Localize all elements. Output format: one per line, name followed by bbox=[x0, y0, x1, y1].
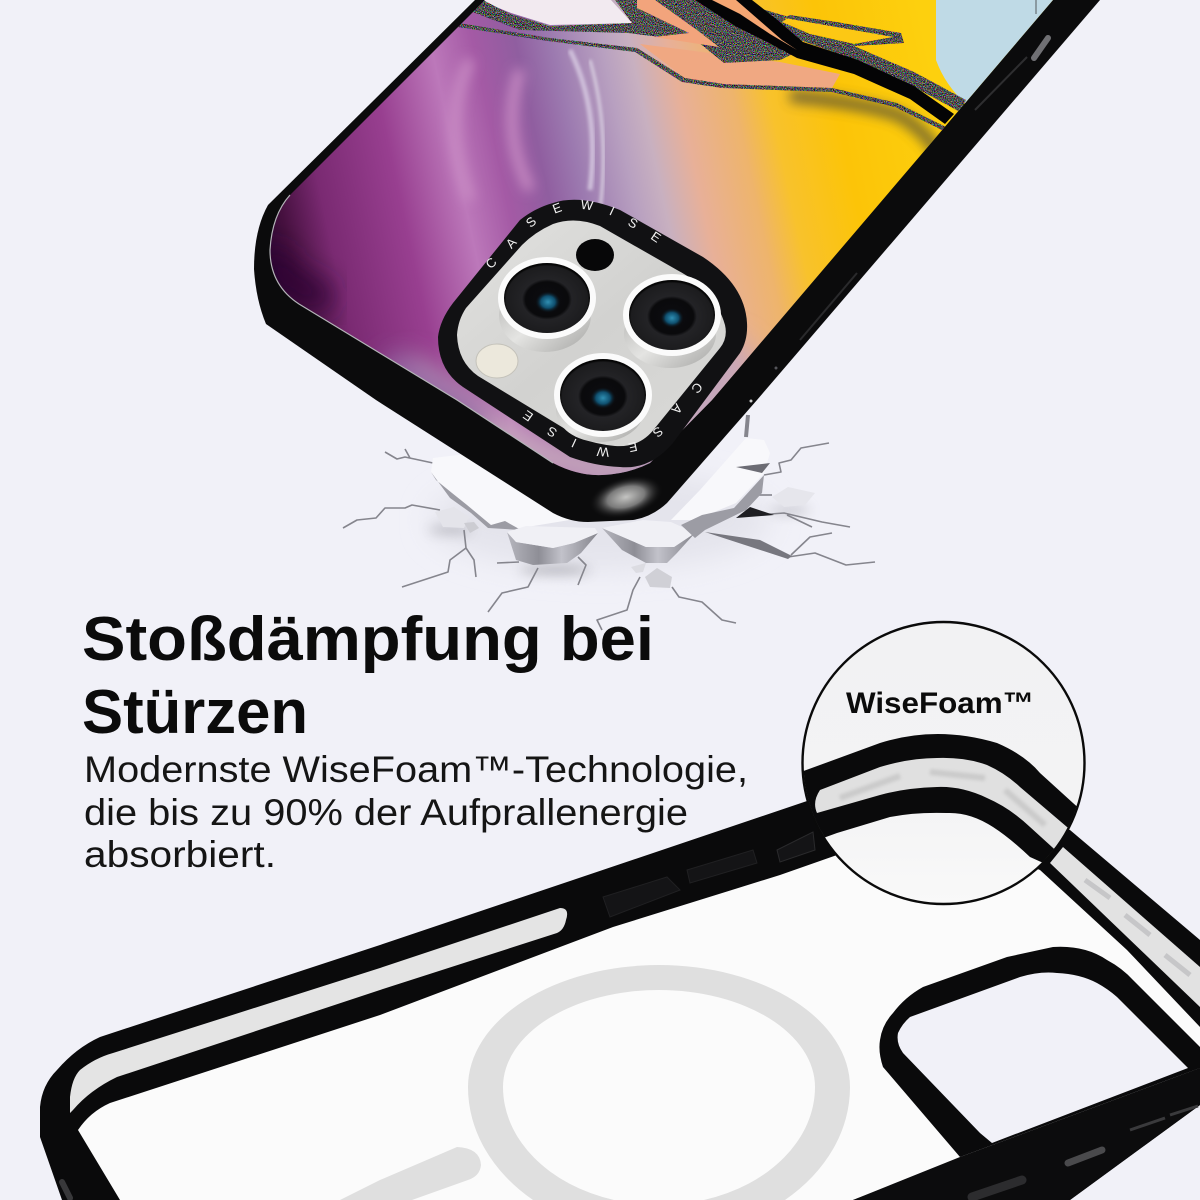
ring lettering bottom: C bbox=[688, 380, 706, 396]
body text: absorbiert. bbox=[84, 834, 276, 875]
side buttons bbox=[603, 877, 680, 917]
black ribbon bbox=[695, 0, 954, 124]
body text: die bis zu 90% der Aufprallenergie bbox=[84, 792, 688, 833]
microphone bbox=[576, 239, 614, 271]
crack lines bbox=[343, 415, 875, 630]
ring lettering bottom bbox=[520, 380, 706, 460]
camera cutout frame bbox=[879, 947, 1200, 1157]
lower peach band bbox=[640, 44, 840, 88]
body text: Modernste WiseFoam™-Technologie, bbox=[84, 749, 748, 790]
right rim bbox=[671, 438, 774, 538]
crater with cracks bbox=[343, 415, 875, 630]
body text bbox=[84, 749, 748, 875]
left rim top bbox=[431, 450, 600, 528]
ring lettering top: I bbox=[607, 203, 617, 219]
brush streaks bbox=[455, 60, 530, 200]
ring lettering top: E bbox=[550, 199, 564, 217]
orange ribbon bbox=[712, 0, 797, 50]
magnified foam gap bbox=[815, 758, 1068, 849]
ring lettering top: C bbox=[482, 254, 500, 272]
magsafe stem bbox=[340, 1147, 481, 1200]
ring lettering top: E bbox=[648, 228, 664, 246]
camera plate bbox=[457, 220, 726, 446]
glossy corner highlight bbox=[584, 468, 668, 526]
chunk center bbox=[602, 520, 695, 563]
case body bbox=[254, 0, 1100, 522]
callout label: WiseFoam™ bbox=[846, 687, 1034, 720]
lens 1 bbox=[498, 257, 596, 352]
phone with printed case bbox=[254, 0, 1100, 526]
interior clear panel bbox=[78, 830, 1200, 1200]
magnified case corner bbox=[804, 734, 1076, 862]
yellow loop bbox=[784, 18, 893, 43]
left gap slot bbox=[70, 908, 567, 1113]
peach ribbon bbox=[637, 0, 719, 47]
ring lettering bottom: S bbox=[544, 423, 560, 441]
blue panel bbox=[936, 0, 1060, 104]
small left rock bbox=[435, 507, 469, 528]
ring lettering bottom: S bbox=[650, 423, 666, 441]
camera cutout bbox=[898, 972, 1188, 1143]
ring lettering bottom: E bbox=[627, 439, 639, 455]
callout circle outline bbox=[802, 622, 1084, 904]
ring lettering bottom: A bbox=[668, 401, 686, 417]
case outer frame bbox=[40, 770, 1200, 1200]
shadow under swirl bbox=[790, 96, 940, 158]
chunk left bbox=[507, 526, 598, 565]
top swirl bbox=[479, 0, 632, 25]
ring lettering top: A bbox=[503, 235, 520, 251]
small rocks bbox=[772, 487, 815, 507]
port pills bbox=[1068, 1150, 1102, 1163]
ring lettering top: S bbox=[523, 213, 539, 230]
ring lettering top: W bbox=[580, 197, 595, 213]
left rim side bbox=[431, 472, 521, 530]
bottom frame band bbox=[853, 1068, 1200, 1200]
ring lettering top bbox=[482, 197, 664, 272]
art back panel bbox=[260, 0, 1060, 480]
heading: Stoßdämpfung bei bbox=[82, 605, 654, 674]
lens 3 bbox=[554, 353, 652, 442]
ring lettering bottom: W bbox=[596, 444, 610, 460]
callout circle fill bbox=[802, 622, 1084, 904]
right gap slot bbox=[1050, 847, 1200, 1007]
clear case bbox=[40, 770, 1200, 1200]
ring lettering bottom: E bbox=[520, 407, 536, 425]
camera ring bbox=[438, 197, 747, 467]
heading: Stürzen bbox=[82, 678, 308, 747]
lens 2 bbox=[623, 274, 721, 368]
right wedge crack bbox=[705, 532, 792, 559]
flash bbox=[476, 344, 518, 378]
magsafe ring bbox=[468, 965, 850, 1200]
heading bbox=[82, 605, 654, 747]
side buttons bbox=[1034, 38, 1048, 58]
ring lettering bottom: I bbox=[569, 435, 579, 451]
ring lettering top: S bbox=[625, 214, 641, 232]
